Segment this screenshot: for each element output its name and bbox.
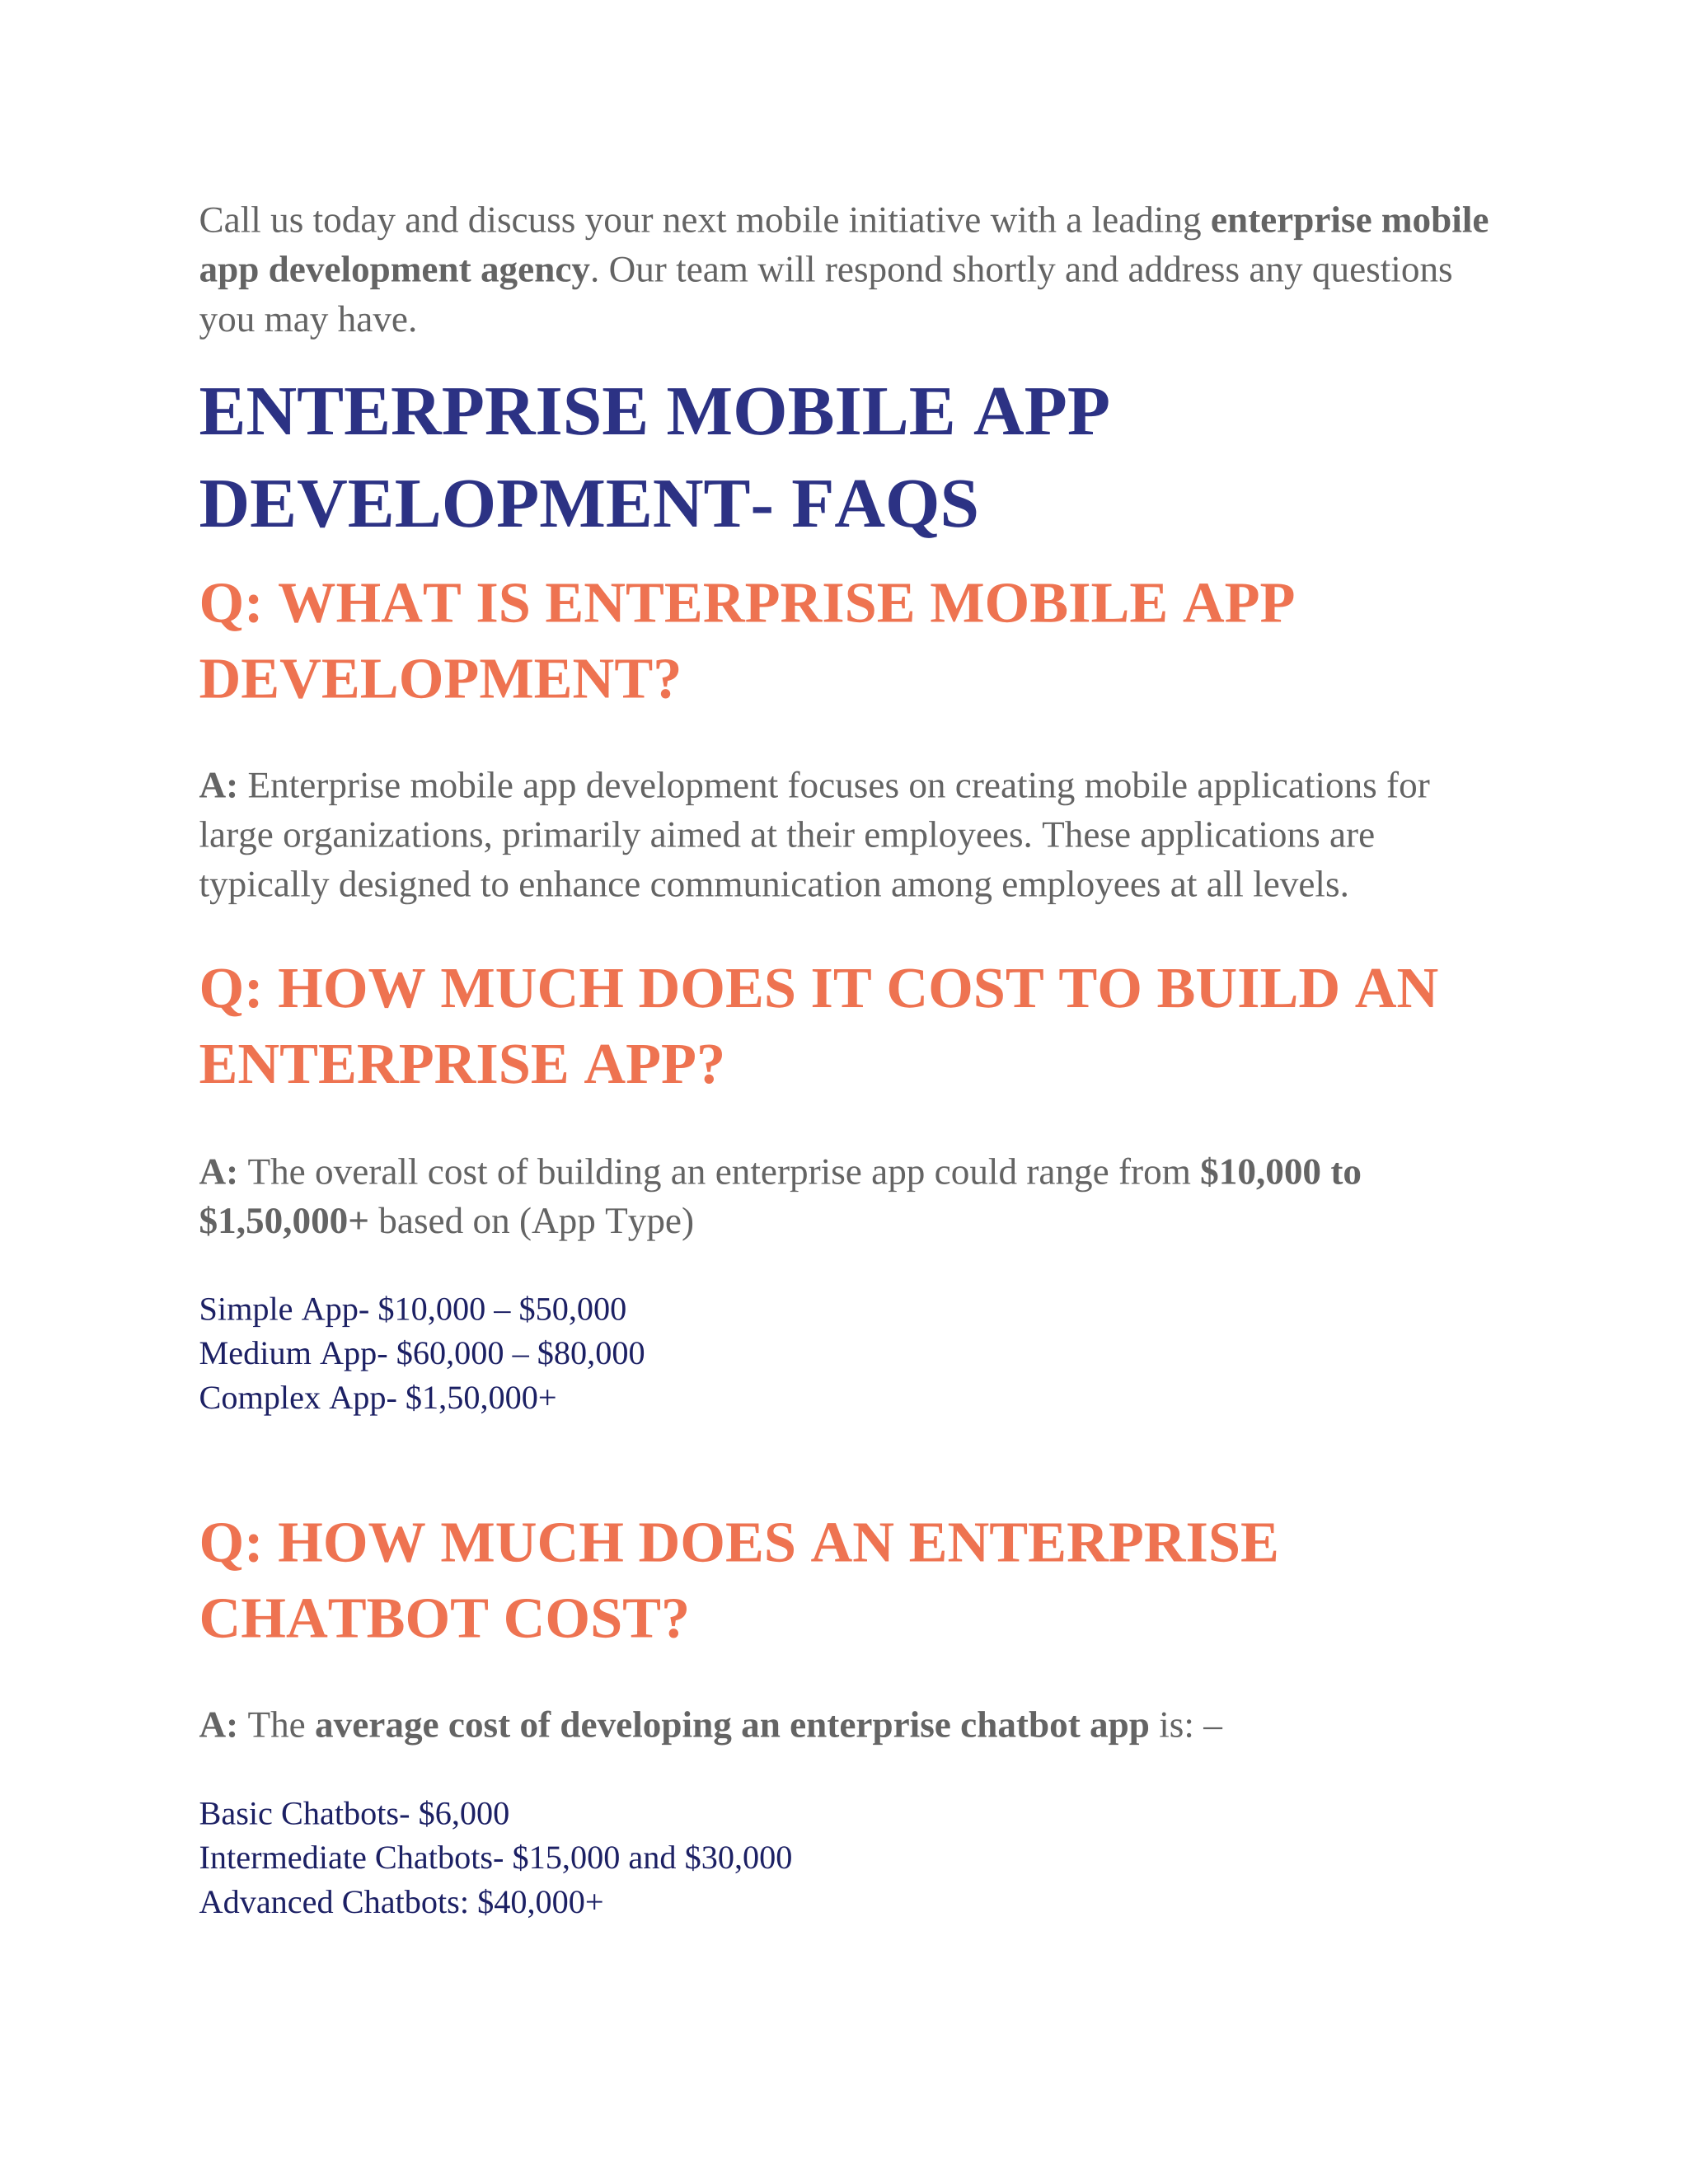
title — [199, 373, 1110, 542]
answer: cost to build an enterprise app — [199, 1151, 1362, 1241]
question heading: what is enterprise mobile app development: Q: WHAT IS ENTERPRISE MOBILE APP — [199, 570, 1295, 635]
list: app cost by type: Simple App- $10,000 – $50,000 — [199, 1291, 626, 1328]
answer: cost to build an enterprise app: A: The overall cost of building an enterprise app could range from $10,000 to — [199, 1151, 1362, 1192]
list: chatbot cost by type — [199, 1794, 792, 1920]
answer: what is enterprise mobile app development — [199, 765, 1430, 905]
question heading: enterprise chatbot cost: Q: HOW MUCH DOES AN ENTERPRISE — [199, 1511, 1279, 1575]
question heading: cost to build an enterprise app: Q: HOW MUCH DOES IT COST TO BUILD AN — [199, 956, 1438, 1020]
answer: what is enterprise mobile app development: typically designed to enhance communication among employees at all levels. — [199, 864, 1349, 905]
answer: what is enterprise mobile app development: A: Enterprise mobile app development focuses on creating mobile applications for — [199, 765, 1430, 806]
question heading: enterprise chatbot cost: CHATBOT COST? — [199, 1586, 690, 1651]
answer: enterprise chatbot cost: A: The average cost of developing an enterprise chatbot app is: – — [199, 1704, 1222, 1746]
list: app cost by type: Complex App- $1,50,000+ — [199, 1379, 557, 1416]
answer: what is enterprise mobile app development: large organizations, primarily aimed at their employees. These applications are — [199, 814, 1375, 855]
list: chatbot cost by type: Intermediate Chatbots- $15,000 and $30,000 — [199, 1839, 792, 1876]
intro paragraph: Call us today and discuss your next mobile initiative with a leading enterprise mobile — [199, 199, 1489, 241]
title: DEVELOPMENT- FAQS — [199, 465, 979, 542]
question heading: cost to build an enterprise app — [199, 956, 1438, 1096]
question heading: what is enterprise mobile app development: DEVELOPMENT? — [199, 647, 682, 711]
question heading: cost to build an enterprise app: ENTERPRISE APP? — [199, 1032, 725, 1096]
question heading: enterprise chatbot cost — [199, 1511, 1279, 1651]
list: app cost by type — [199, 1291, 645, 1416]
intro paragraph: you may have. — [199, 298, 417, 340]
title: ENTERPRISE MOBILE APP — [199, 373, 1110, 450]
list: chatbot cost by type: Basic Chatbots- $6,000 — [199, 1794, 509, 1831]
answer: cost to build an enterprise app: $1,50,000+ based on (App Type) — [199, 1200, 694, 1241]
list: chatbot cost by type: Advanced Chatbots: $40,000+ — [199, 1883, 604, 1920]
intro paragraph — [199, 199, 1489, 340]
question heading: what is enterprise mobile app development — [199, 570, 1295, 711]
list: app cost by type: Medium App- $60,000 – $80,000 — [199, 1334, 645, 1371]
intro paragraph: app development agency. Our team will respond shortly and address any questions — [199, 249, 1453, 290]
